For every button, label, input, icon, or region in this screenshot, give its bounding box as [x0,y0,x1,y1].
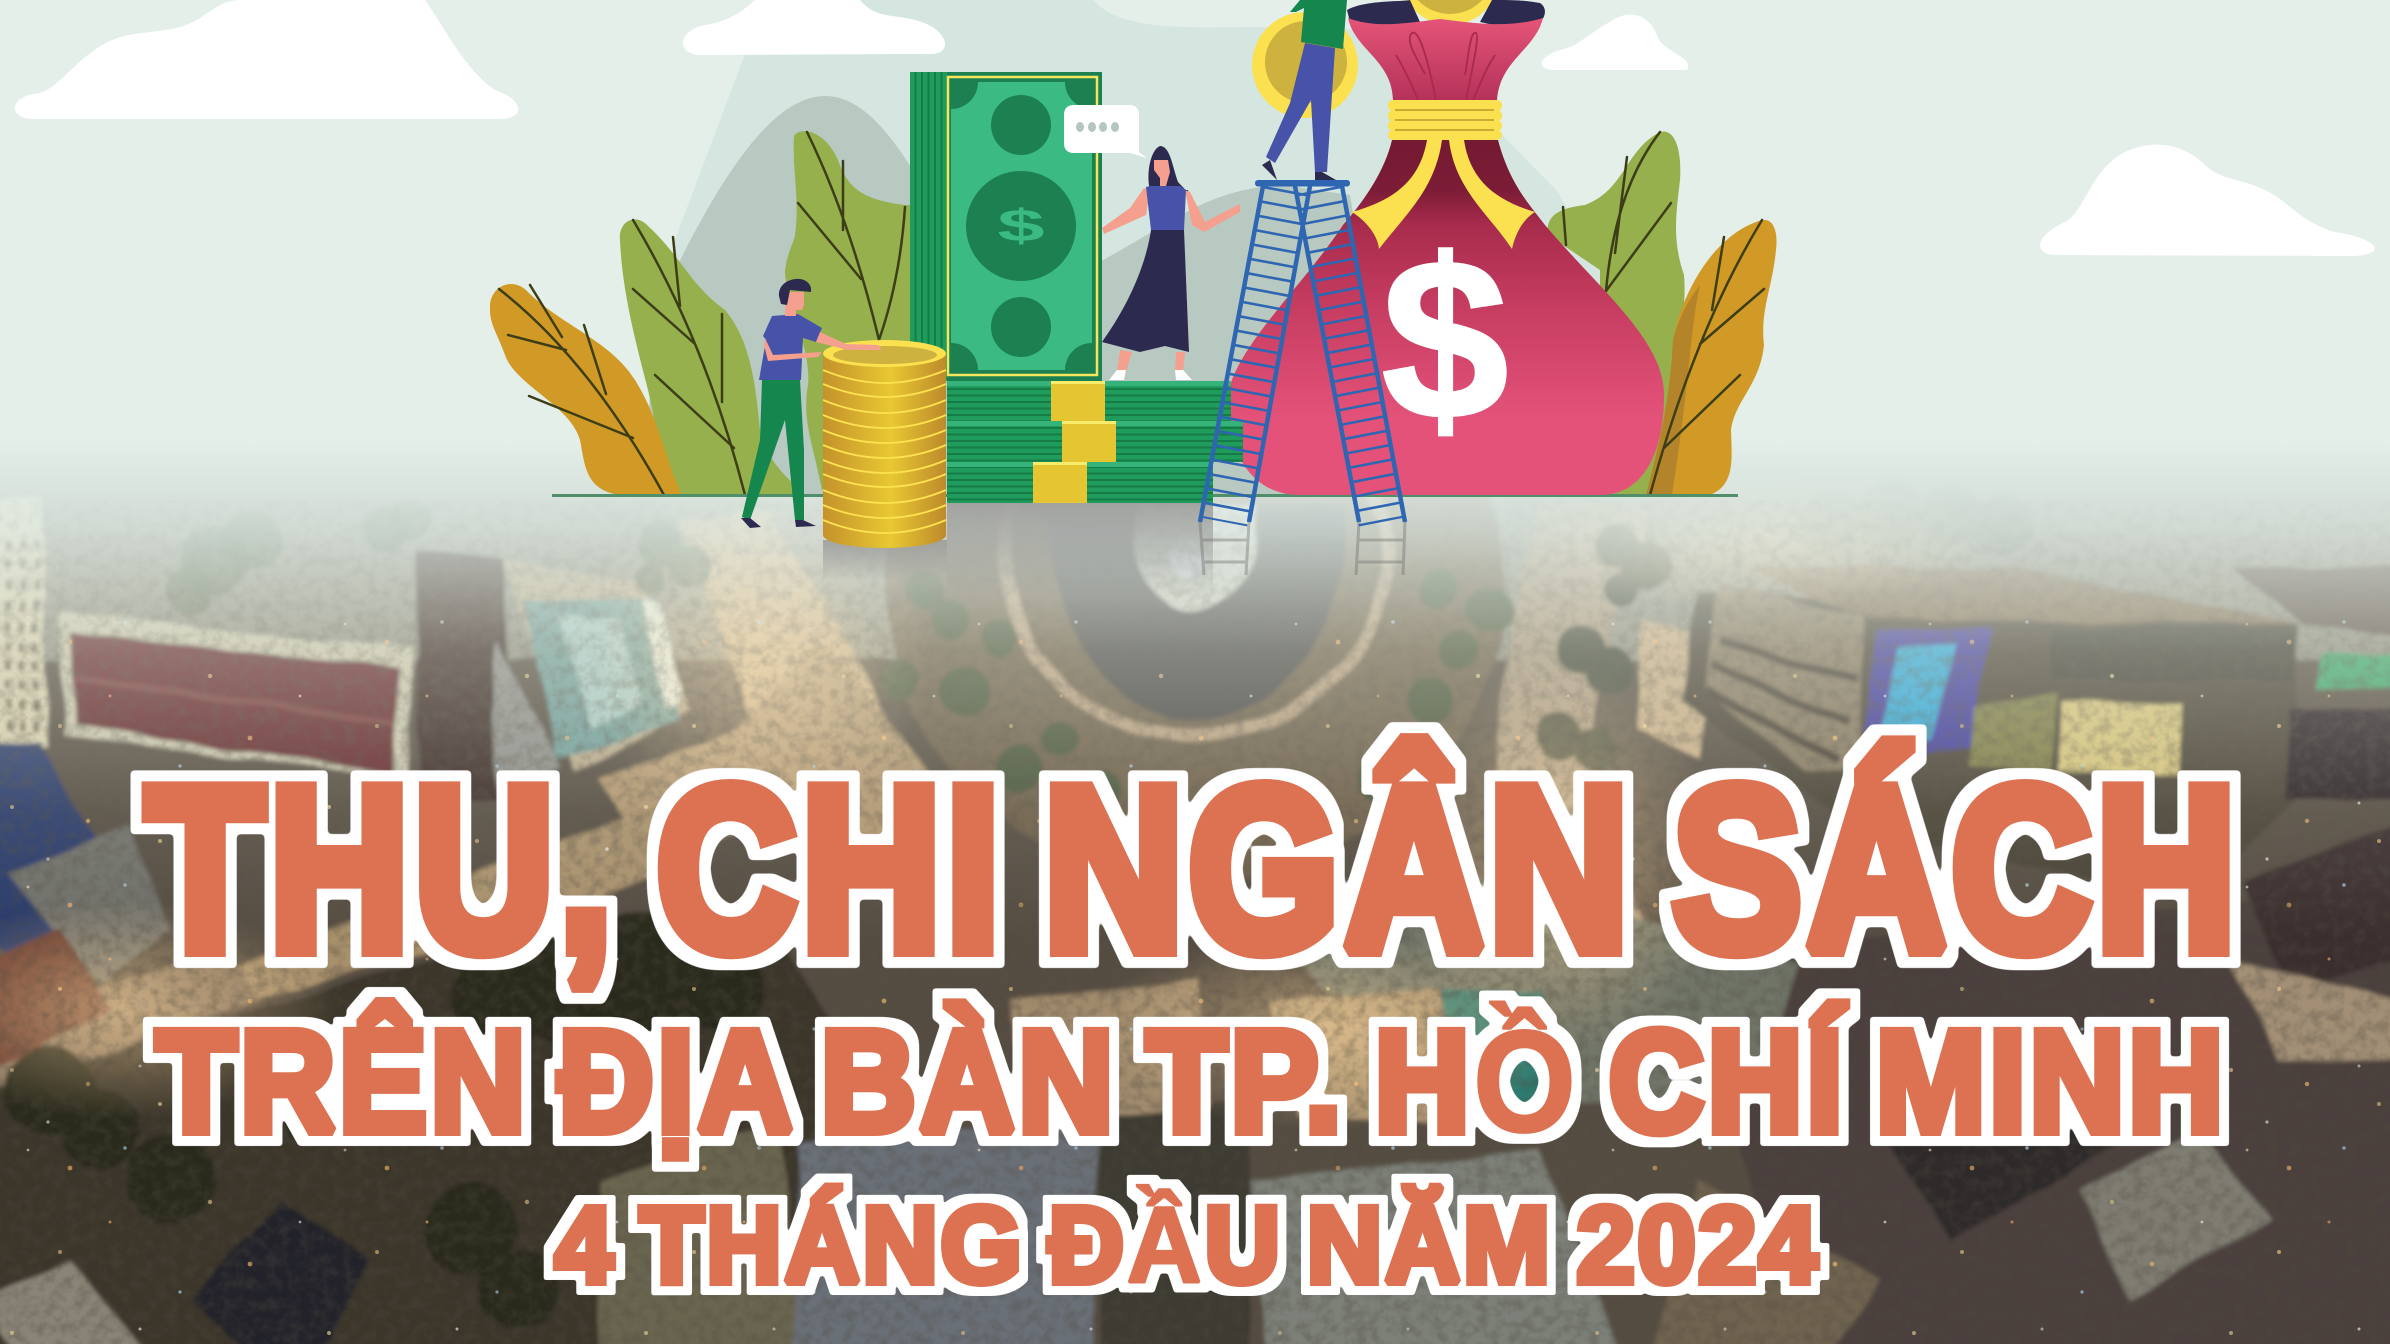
skirt [1102,230,1189,352]
title [146,740,2241,1305]
person on ladder with coin [1252,0,1358,180]
trees right of plaza [1508,523,1671,852]
bag frills [1348,18,1543,100]
grey wedge [490,640,560,800]
ladder reflection [1200,522,1405,575]
arms [764,332,882,361]
shirt [759,314,822,380]
hotel complex [1680,566,2390,900]
trousers [742,380,804,520]
tree canopy left [166,500,712,614]
warm street glows [0,460,2000,1130]
leaf: gold right [1646,220,1777,495]
arms [1102,188,1240,234]
leaf: tall green left [785,131,912,490]
warm boulevard [680,510,900,790]
dark window bay [2050,628,2296,682]
coin behind bag neck [1400,0,1500,25]
navy collar [1347,0,1545,28]
red roof building [62,610,414,780]
dark lower left district [0,900,840,1344]
hair [779,279,811,305]
grey building bottom centre [790,1120,1100,1344]
cloud: right of bag [1542,15,1688,70]
dark brown tower block [415,550,510,800]
dollar sign on note: $ [997,201,1045,251]
large coin [1252,12,1358,118]
yellow flaps [1352,140,1535,249]
teal roof building [505,560,690,775]
grey hills [640,96,1400,495]
title line 3: 4 THÁNG ĐẦU NĂM 2024 [555,1184,1820,1305]
clouds [15,0,2375,256]
speech bubble [1064,105,1147,158]
rear ladder rungs [1224,190,1286,522]
plaza [880,300,1512,880]
hazy tree cluster behind hotel [1800,481,2035,555]
top [1146,186,1186,230]
illustration: money scene [490,0,1777,598]
jacket [1290,0,1347,49]
stadium roof centre right [1250,880,1800,1120]
face and neck [1154,160,1170,186]
title line 2: TRÊN ĐỊA BÀN TP. HỒ CHÍ MINH [156,1001,2227,1162]
yellow straps [1033,381,1116,503]
blue and grey roofs, far left [0,740,170,1080]
lights texture [0,600,2390,1344]
legs [1117,350,1185,372]
hair [1148,146,1197,225]
head [785,292,804,316]
cream tower, left edge [0,500,48,745]
socks [1109,370,1192,380]
dollar sign on bag: $ [1382,213,1508,467]
pale mountain [660,0,1620,495]
ladder [1200,180,1405,575]
cloud: far right [2040,145,2375,256]
banknote stacks flat [947,381,1243,503]
note corners [951,82,1092,370]
aerial city photo background [0,300,2390,1344]
banknote stack upright [910,72,1102,381]
note medallions [966,95,1076,357]
leaf: gold left [490,284,682,495]
road beside plaza [1490,500,1680,1030]
ladder rails [1200,186,1405,522]
hotel roof [1744,566,2300,625]
woman [1102,146,1240,380]
pool [1862,628,1990,765]
trousers [1266,43,1335,172]
coin stack [823,340,946,548]
cloud: top centre [683,0,945,55]
leaf: green middle left [620,219,805,495]
ground line [552,494,1738,497]
photo grain [0,500,2390,1344]
reflections under coins and money [823,503,1213,598]
man with coins [741,279,882,528]
hotel wing [1705,580,1862,770]
fold lines [1396,33,1495,100]
front ladder rungs [1318,190,1382,522]
bag body [1227,140,1664,495]
south east quarter [1640,810,2390,1344]
cloud: top left [15,0,518,119]
money bag [1227,0,1664,495]
tie band [1388,100,1502,140]
leaf: green right [1548,132,1685,495]
ladder platform [1255,180,1350,186]
shoes [1262,160,1336,180]
shoes [741,518,816,528]
fog fading the photo into the sky [0,300,2390,940]
